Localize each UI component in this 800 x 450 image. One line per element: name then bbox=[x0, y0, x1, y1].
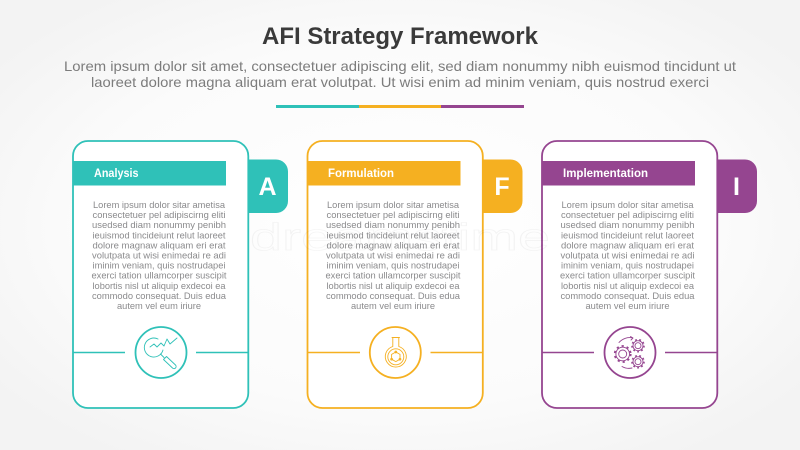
heading band: Formulation: Formulation bbox=[328, 166, 394, 180]
heading band: Implementation bbox=[542, 161, 695, 186]
body text: commodo consequat. Duis edua bbox=[92, 291, 227, 301]
body text bbox=[560, 200, 695, 311]
body text: lobortis nisl ut aliquip exdecoi ea bbox=[326, 281, 460, 291]
watermark: dreamstime bbox=[250, 217, 550, 259]
body text: commodo consequat. Duis edua bbox=[326, 291, 461, 301]
tab: letter F bbox=[482, 160, 522, 213]
panel: Formulation bbox=[308, 141, 522, 408]
body text: exerci tation ullamcorper suscipit bbox=[92, 271, 227, 281]
body text: usedsed diam nonummy penibh bbox=[92, 220, 226, 230]
body text: autem vel eum iriure bbox=[586, 301, 670, 311]
body text: dolore magnaw aliquam eri erat bbox=[326, 240, 460, 250]
tab: letter A: A bbox=[258, 173, 277, 201]
icon: gears bbox=[604, 327, 656, 378]
body text: lobortis nisl ut aliquip exdecoi ea bbox=[92, 281, 226, 291]
body text: ieuismod tincideiunt relut laoreet bbox=[561, 230, 694, 240]
panel: Analysis bbox=[73, 141, 288, 408]
body text: consectetuer pel adipiscirng eliti bbox=[561, 210, 694, 220]
heading band: Analysis bbox=[73, 161, 226, 186]
body text: dolore magnaw aliquam eri erat bbox=[561, 240, 694, 250]
body text: volutpata ut wisi enimedai re adi bbox=[92, 250, 226, 260]
body text: dolore magnaw aliquam eri erat bbox=[92, 240, 226, 250]
subtitle text bbox=[64, 58, 736, 90]
body text: lobortis nisl ut aliquip exdecoi ea bbox=[561, 281, 695, 291]
body text bbox=[92, 200, 227, 311]
body text bbox=[326, 200, 461, 311]
tab: letter F: F bbox=[494, 173, 510, 201]
icon: flask bbox=[370, 327, 421, 378]
title: AFI Strategy Framework bbox=[262, 23, 539, 50]
heading band: Implementation: Implementation bbox=[563, 166, 648, 180]
tricolor divider bar bbox=[276, 105, 524, 108]
body text: ieuismod tincideiunt relut laoreet bbox=[92, 230, 226, 240]
card outline bbox=[542, 141, 717, 408]
body text: exerci tation ullamcorper suscipit bbox=[326, 271, 461, 281]
card outline bbox=[308, 141, 483, 408]
panel: Implementation bbox=[542, 141, 757, 408]
body text: volutpata ut wisi enimedai re adi bbox=[326, 250, 460, 260]
heading band: Analysis: Analysis bbox=[94, 166, 139, 180]
body text: autem vel eum iriure bbox=[117, 301, 201, 311]
tab: letter I: I bbox=[733, 173, 740, 201]
tab: letter I bbox=[717, 160, 757, 213]
body text: consectetuer pel adipiscirng eliti bbox=[92, 210, 226, 220]
body text: usedsed diam nonummy penibh bbox=[326, 220, 460, 230]
body text: iminim veniam, quis nostrudapei bbox=[326, 261, 460, 271]
body text: Lorem ipsum dolor sitar ametisa bbox=[327, 200, 460, 210]
body text: ieuismod tincideiunt relut laoreet bbox=[326, 230, 460, 240]
body text: Lorem ipsum dolor sitar ametisa bbox=[562, 200, 694, 210]
body text: autem vel eum iriure bbox=[351, 301, 435, 311]
body text: Lorem ipsum dolor sitar ametisa bbox=[93, 200, 226, 210]
icon: magnifying glass with chart bbox=[136, 327, 186, 378]
subtitle text: Lorem ipsum dolor sit amet, consectetuer adipiscing elit, sed diam nonummy nibh euismod tincidunt ut bbox=[64, 58, 736, 74]
body text: exerci tation ullamcorper suscipit bbox=[560, 271, 695, 281]
subtitle text: laoreet dolore magna aliquam erat volutpat. Ut wisi enim ad minim veniam, quis nostrud exerci bbox=[91, 74, 709, 90]
body text: commodo consequat. Duis edua bbox=[560, 291, 695, 301]
heading band: Formulation bbox=[308, 161, 460, 186]
body text: consectetuer pel adipiscirng eliti bbox=[326, 210, 460, 220]
card outline bbox=[73, 141, 248, 408]
body text: iminim veniam, quis nostrudapei bbox=[561, 261, 694, 271]
tab: letter A bbox=[248, 160, 288, 213]
body text: iminim veniam, quis nostrudapei bbox=[92, 261, 226, 271]
body text: usedsed diam nonummy penibh bbox=[560, 220, 694, 230]
body text: volutpata ut wisi enimedai re adi bbox=[560, 250, 694, 260]
